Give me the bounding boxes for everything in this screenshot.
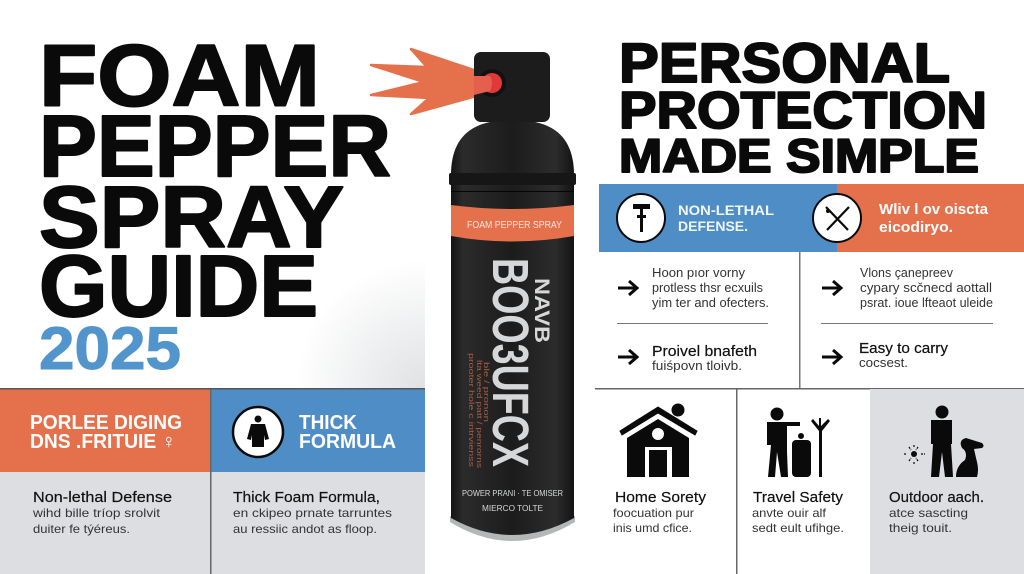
- orange banner: PORLEE DIGING: [30, 412, 182, 434]
- label: foam pepper spray: FOAM PEPPER SPRAY: [467, 220, 562, 231]
- benefit text 4: cocsest.: [859, 356, 908, 370]
- card: travel safety: anvte ouir alf: [752, 506, 827, 520]
- orange label band: [451, 205, 574, 242]
- can body: [451, 122, 574, 535]
- benefit text 2: [652, 343, 757, 373]
- card: home safety: inis umd cfice.: [613, 521, 692, 535]
- text: thick foam formula: en ckipeo prnate tarruntes: [233, 506, 392, 520]
- icon: tool in circle: [617, 194, 665, 242]
- icon: person in circle: [233, 407, 283, 457]
- panel: use cases: [613, 389, 1024, 574]
- rotated orange fine print: prooter hole c intrvienss: [467, 353, 474, 468]
- rotated small brand: NAVB: [530, 278, 553, 343]
- text: non-lethal defense: Non-lethal Defense: [33, 489, 172, 506]
- card: outdoor: Outdoor aach.: [889, 489, 984, 506]
- orange banner: DNS .FRITUIE ♀: [30, 431, 176, 453]
- rotated orange fine print: [467, 353, 489, 469]
- title: personal protection made simple: MADE SIMPLE: [619, 129, 979, 182]
- can cap: [474, 52, 550, 122]
- title: foam pepper spray guide: SPRAY: [39, 169, 344, 266]
- card: home safety: [613, 404, 707, 535]
- text: non-lethal defense: [32, 489, 172, 536]
- title: personal protection made simple: PERSONAL: [619, 31, 950, 94]
- title: foam pepper spray guide: GUIDE: [39, 238, 318, 335]
- can fine print: MIERCO TOLTE: [482, 503, 543, 513]
- benefit text 3: [860, 266, 993, 310]
- card: outdoor: [889, 406, 984, 535]
- can fine print: [462, 488, 563, 513]
- text: thick foam formula: [233, 489, 392, 536]
- can base ring: [450, 516, 575, 541]
- title: personal protection made simple: PROTECTION: [619, 82, 987, 140]
- orange banner: eicodiryo.: [879, 219, 953, 236]
- benefit text 2: fuiśpovn tloivb.: [652, 359, 742, 373]
- blue banner: NON-LETHAL: [678, 202, 774, 218]
- card: outdoor: theig touit.: [889, 521, 952, 535]
- card: travel safety: sedt eult ufihge.: [752, 521, 844, 535]
- benefit text 2: Proivel bnafeth: [652, 343, 757, 360]
- icon: person with canister: [767, 408, 830, 477]
- benefit text 1: Hoon pıor vorny: [652, 266, 746, 280]
- benefit text 4: Easy to carry: [859, 340, 949, 357]
- title: personal protection made simple: [619, 31, 987, 182]
- can fine print: POWER PRANI · TE OMISER: [462, 488, 563, 498]
- card: travel safety: Travel Safety: [753, 489, 844, 506]
- blue banner: [211, 389, 425, 472]
- benefit text 3: Vlons çanepreev: [860, 266, 954, 280]
- benefit text 1: [652, 266, 769, 310]
- panel: right banners: [599, 184, 1024, 252]
- orange banner: [0, 389, 210, 472]
- orange banner: [813, 184, 1024, 252]
- icon: house: [620, 404, 697, 477]
- panel: left feature cards: [0, 388, 425, 574]
- arrow: [822, 350, 841, 364]
- benefit text 3: cypary scčnecd aottall: [860, 281, 992, 295]
- blue banner: [599, 184, 837, 252]
- arrow: [822, 281, 841, 295]
- card: travel safety: [752, 408, 844, 535]
- spray can: [449, 52, 576, 541]
- benefit text 1: protless thsr ecxuils: [652, 281, 763, 295]
- icon: person with dog: [904, 406, 984, 477]
- title: foam pepper spray guide: [39, 28, 391, 335]
- icon: spray burst: [371, 49, 480, 114]
- text: thick foam formula: Thick Foam Formula,: [233, 489, 380, 506]
- blue banner: DEFENSE.: [678, 218, 748, 234]
- icon: crossed tools in circle: [813, 194, 861, 242]
- panel: benefit lists: [595, 252, 1024, 390]
- rotated orange fine print: lta weed patt / penrorns: [475, 360, 482, 469]
- text: non-lethal defense: wihd bille tríop srolvit: [32, 506, 161, 520]
- title: foam pepper spray guide: PEPPER: [39, 98, 391, 195]
- rotated brand text: BOO3UFCX: [482, 258, 539, 467]
- card: outdoor: atce sascting: [889, 506, 968, 520]
- card: home safety: foocuation pur: [613, 506, 694, 520]
- text: non-lethal defense: duiter fe týéreus.: [33, 522, 130, 536]
- benefit text 3: psrat. ioue lfteaot uleide: [860, 296, 993, 310]
- title: foam pepper spray guide: FOAM: [39, 28, 320, 124]
- text: thick foam formula: au ressiic andot as floop.: [233, 522, 377, 536]
- benefit text 4: [859, 340, 949, 370]
- year 2025: 2025: [39, 315, 181, 382]
- card: home safety: Home Sorety: [615, 489, 707, 506]
- arrow: [618, 350, 637, 364]
- arrow: [618, 281, 637, 295]
- orange banner: Wliv l ov oiscta: [879, 201, 989, 218]
- blue banner: FORMULA: [299, 431, 396, 453]
- benefit text 1: yim ter and ofecters.: [652, 296, 769, 310]
- rotated orange fine print: ble / pronon: [482, 362, 489, 422]
- blue banner: THICK: [299, 412, 358, 434]
